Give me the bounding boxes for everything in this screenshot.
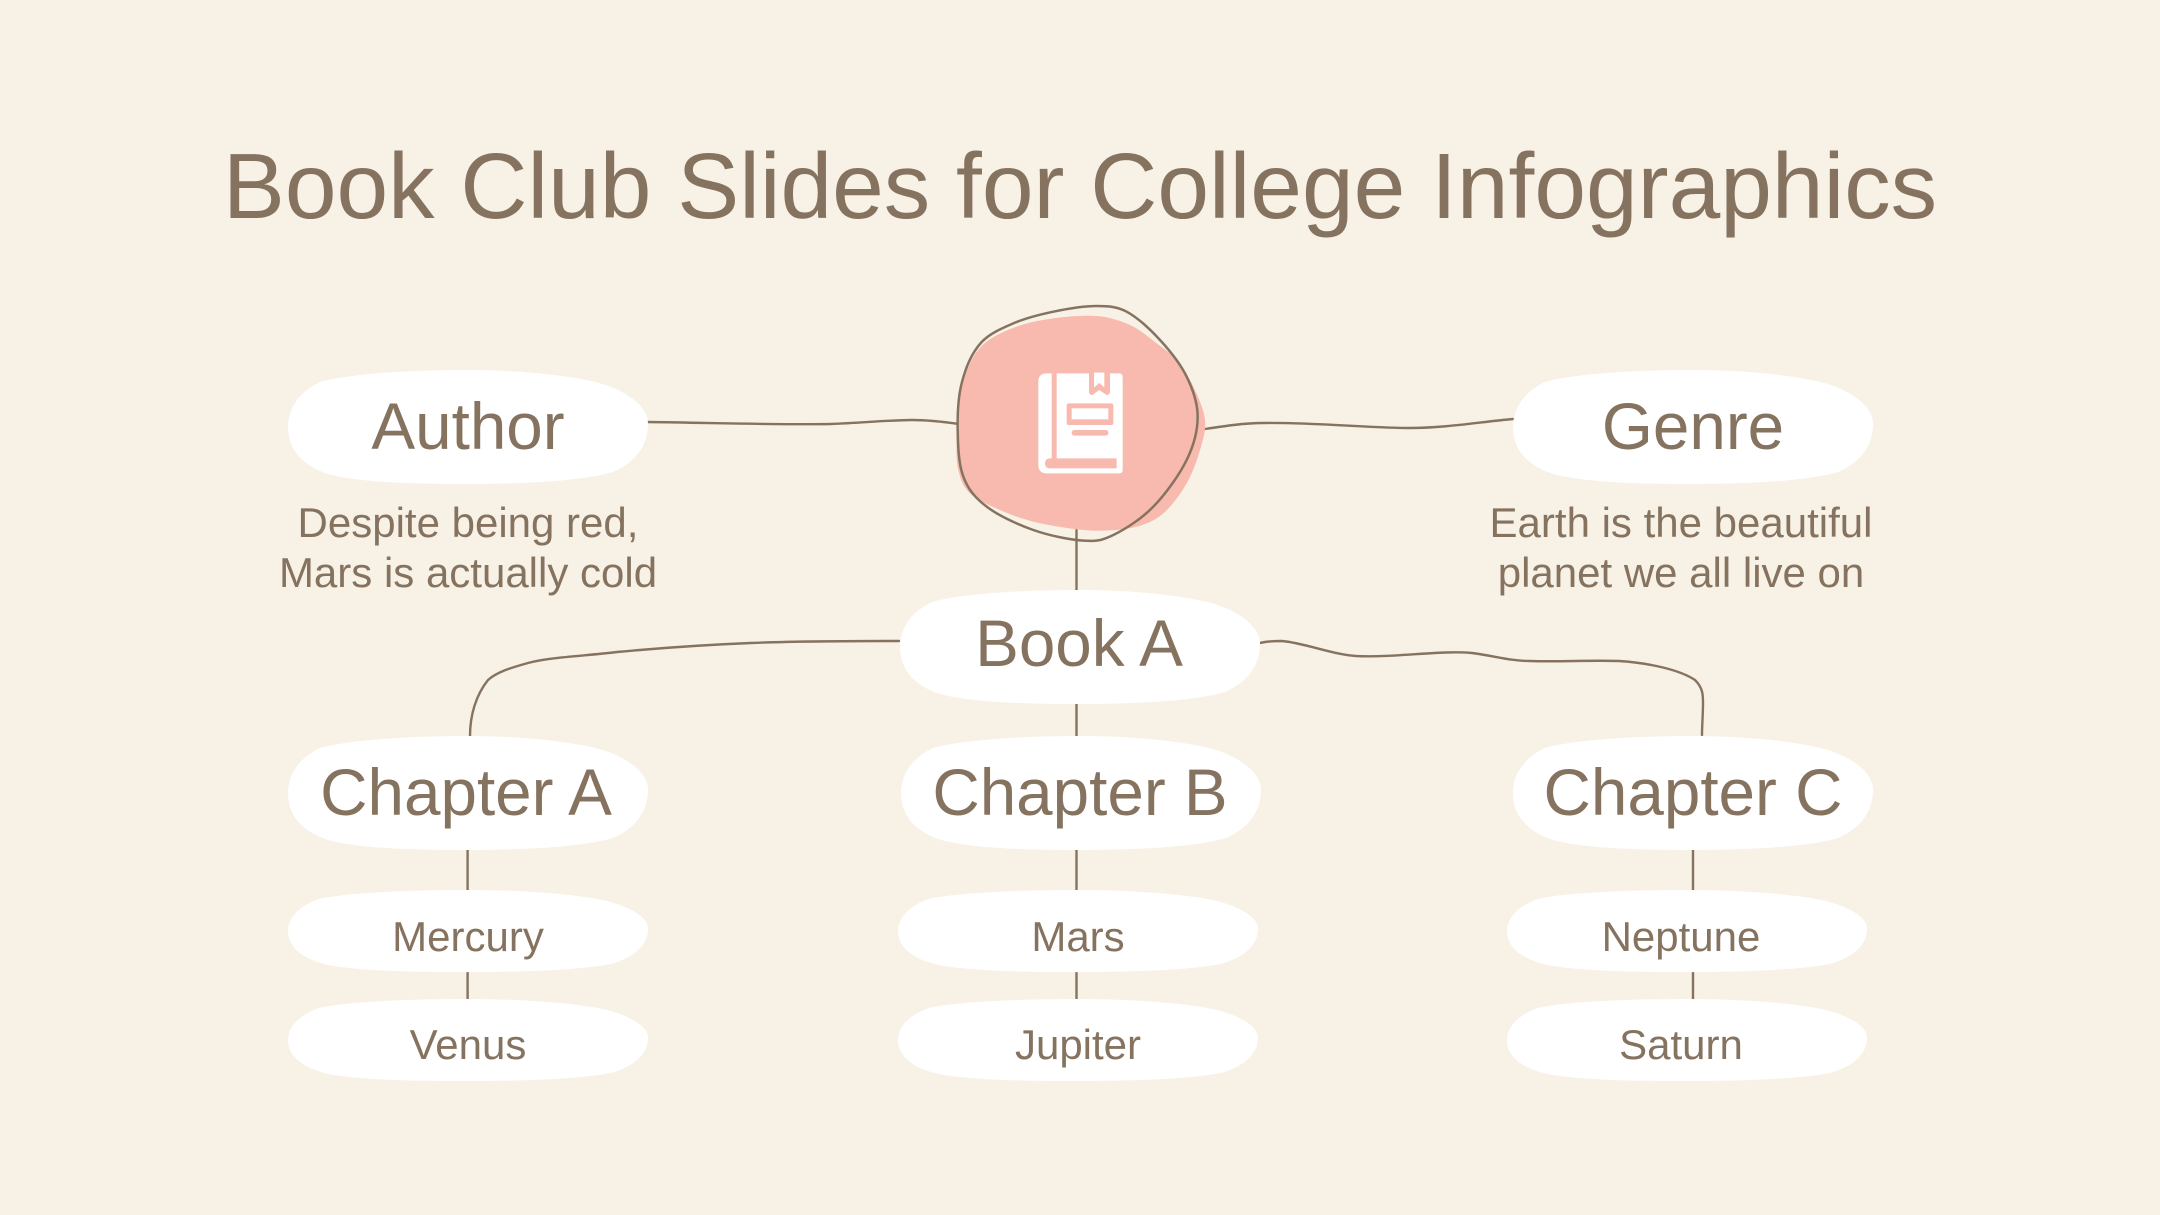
icon: book in blob [956, 306, 1205, 541]
text: genre description: Earth is the beautiful [1490, 499, 1872, 546]
connector: mercury to venus [466, 972, 469, 999]
pink blob [956, 316, 1205, 531]
pill: chapter C: Chapter C [1544, 756, 1842, 829]
connector: icon to book A [1075, 530, 1078, 590]
connector: chapter A to mercury [466, 850, 469, 890]
pill: author: Author [371, 390, 565, 463]
pill: neptune [1507, 890, 1867, 972]
pill: neptune: Neptune [1602, 913, 1760, 960]
connector: book A to chapter C [1260, 641, 1703, 735]
pill: chapter A [288, 736, 648, 850]
connector: chapter B to mars [1075, 850, 1078, 890]
connector: author to icon [648, 420, 959, 424]
pill: book A [900, 590, 1260, 704]
connector: chapter C to neptune [1692, 850, 1694, 890]
text: genre description [1490, 499, 1872, 596]
pill: venus [288, 999, 648, 1081]
pill: mars [898, 890, 1258, 972]
connectors [468, 419, 1703, 999]
text: genre description: planet we all live on [1498, 549, 1864, 596]
pill: saturn [1507, 999, 1867, 1081]
connector: book A to chapter B [1075, 703, 1078, 736]
column: chapter C [1507, 736, 1873, 1081]
pill: mars: Mars [1031, 913, 1125, 960]
pill: genre: Genre [1602, 390, 1784, 463]
book glyph [1038, 373, 1123, 473]
column: chapter A [288, 736, 648, 1081]
text: author description: Mars is actually cold [279, 549, 657, 596]
connector: icon to genre [1205, 419, 1513, 429]
pill: author [288, 370, 648, 484]
pill: chapter B: Chapter B [932, 756, 1228, 829]
connector: neptune to saturn [1692, 972, 1694, 999]
pill: chapter C [1513, 736, 1873, 850]
text: author description [279, 499, 657, 596]
pill: venus: Venus [410, 1021, 526, 1068]
pill: mercury: Mercury [392, 913, 544, 960]
pill: chapter A: Chapter A [320, 756, 612, 829]
pill: genre [1513, 370, 1873, 484]
title: Book Club Slides for College Infographics [223, 134, 1937, 238]
pill: saturn: Saturn [1619, 1021, 1743, 1068]
connector: mars to jupiter [1075, 972, 1078, 999]
column: chapter B [898, 736, 1261, 1081]
blob outline [958, 306, 1198, 541]
text: author description: Despite being red, [298, 499, 638, 546]
pill: jupiter: Jupiter [1015, 1021, 1141, 1068]
pill: jupiter [898, 999, 1258, 1081]
pill: book A: Book A [975, 607, 1183, 680]
pill: mercury [288, 890, 648, 972]
pill: chapter B [901, 736, 1261, 850]
connector: book A to chapter A [470, 641, 899, 736]
